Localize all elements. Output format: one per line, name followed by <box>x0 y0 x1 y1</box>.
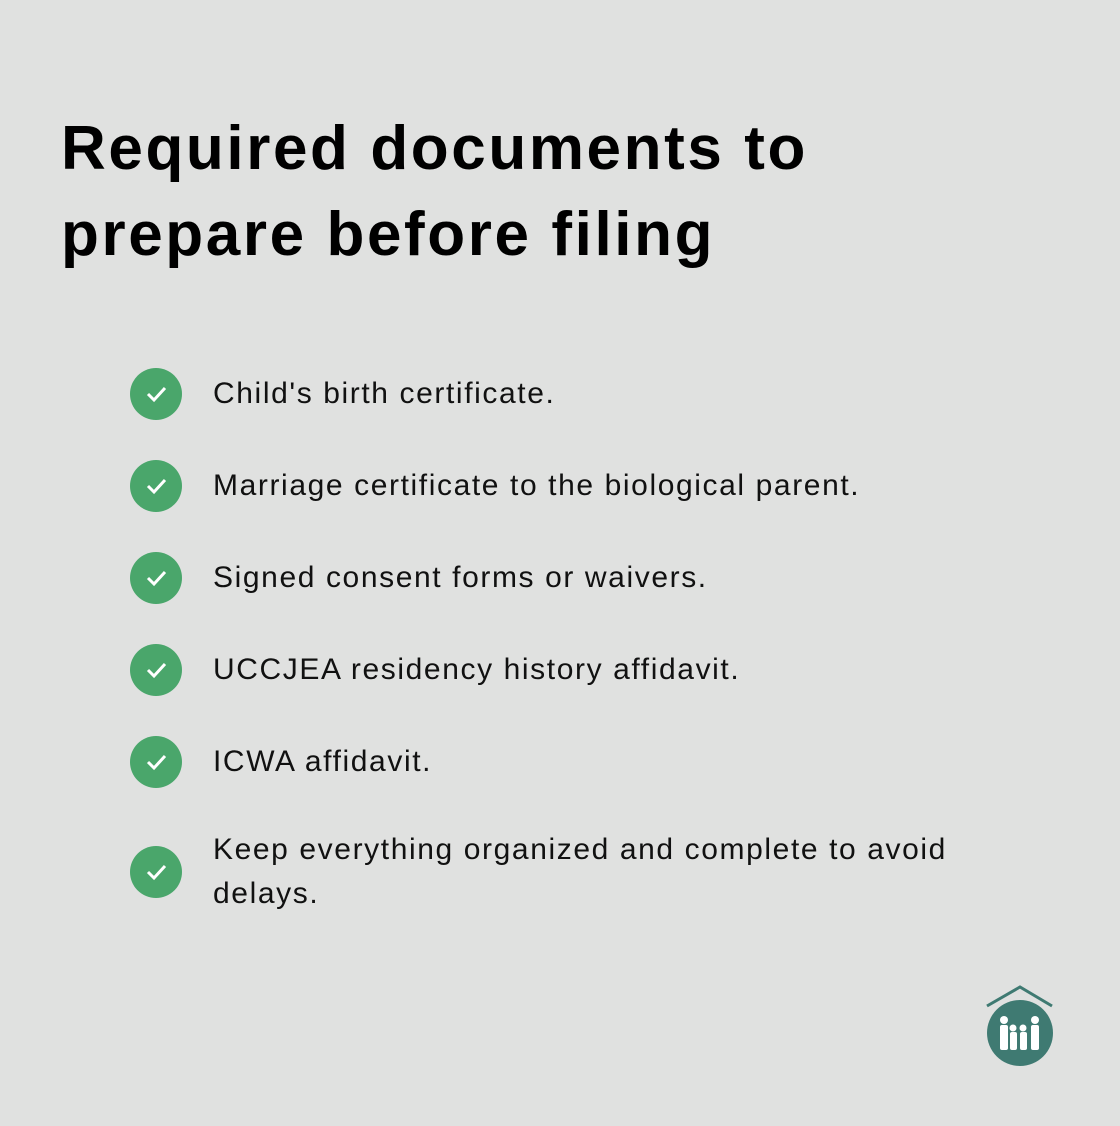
item 5: ICWA affidavit. <box>213 745 432 778</box>
item 6: Keep everything organized and complete to avoid delays. <box>213 833 947 910</box>
title <box>61 114 808 269</box>
item 2: Marriage certificate to the biological parent. <box>213 469 860 502</box>
item 5 <box>130 736 432 788</box>
item 1: Child's birth certificate. <box>213 377 555 410</box>
item 3: Signed consent forms or waivers. <box>213 561 708 594</box>
logo <box>986 985 1053 1066</box>
item 1 <box>130 368 555 420</box>
item 3 <box>130 552 708 604</box>
title: Required documents to <box>61 114 808 183</box>
item 4: UCCJEA residency history affidavit. <box>213 653 740 686</box>
item 2 <box>130 460 860 512</box>
item 4 <box>130 644 740 696</box>
title: prepare before filing <box>61 200 715 269</box>
